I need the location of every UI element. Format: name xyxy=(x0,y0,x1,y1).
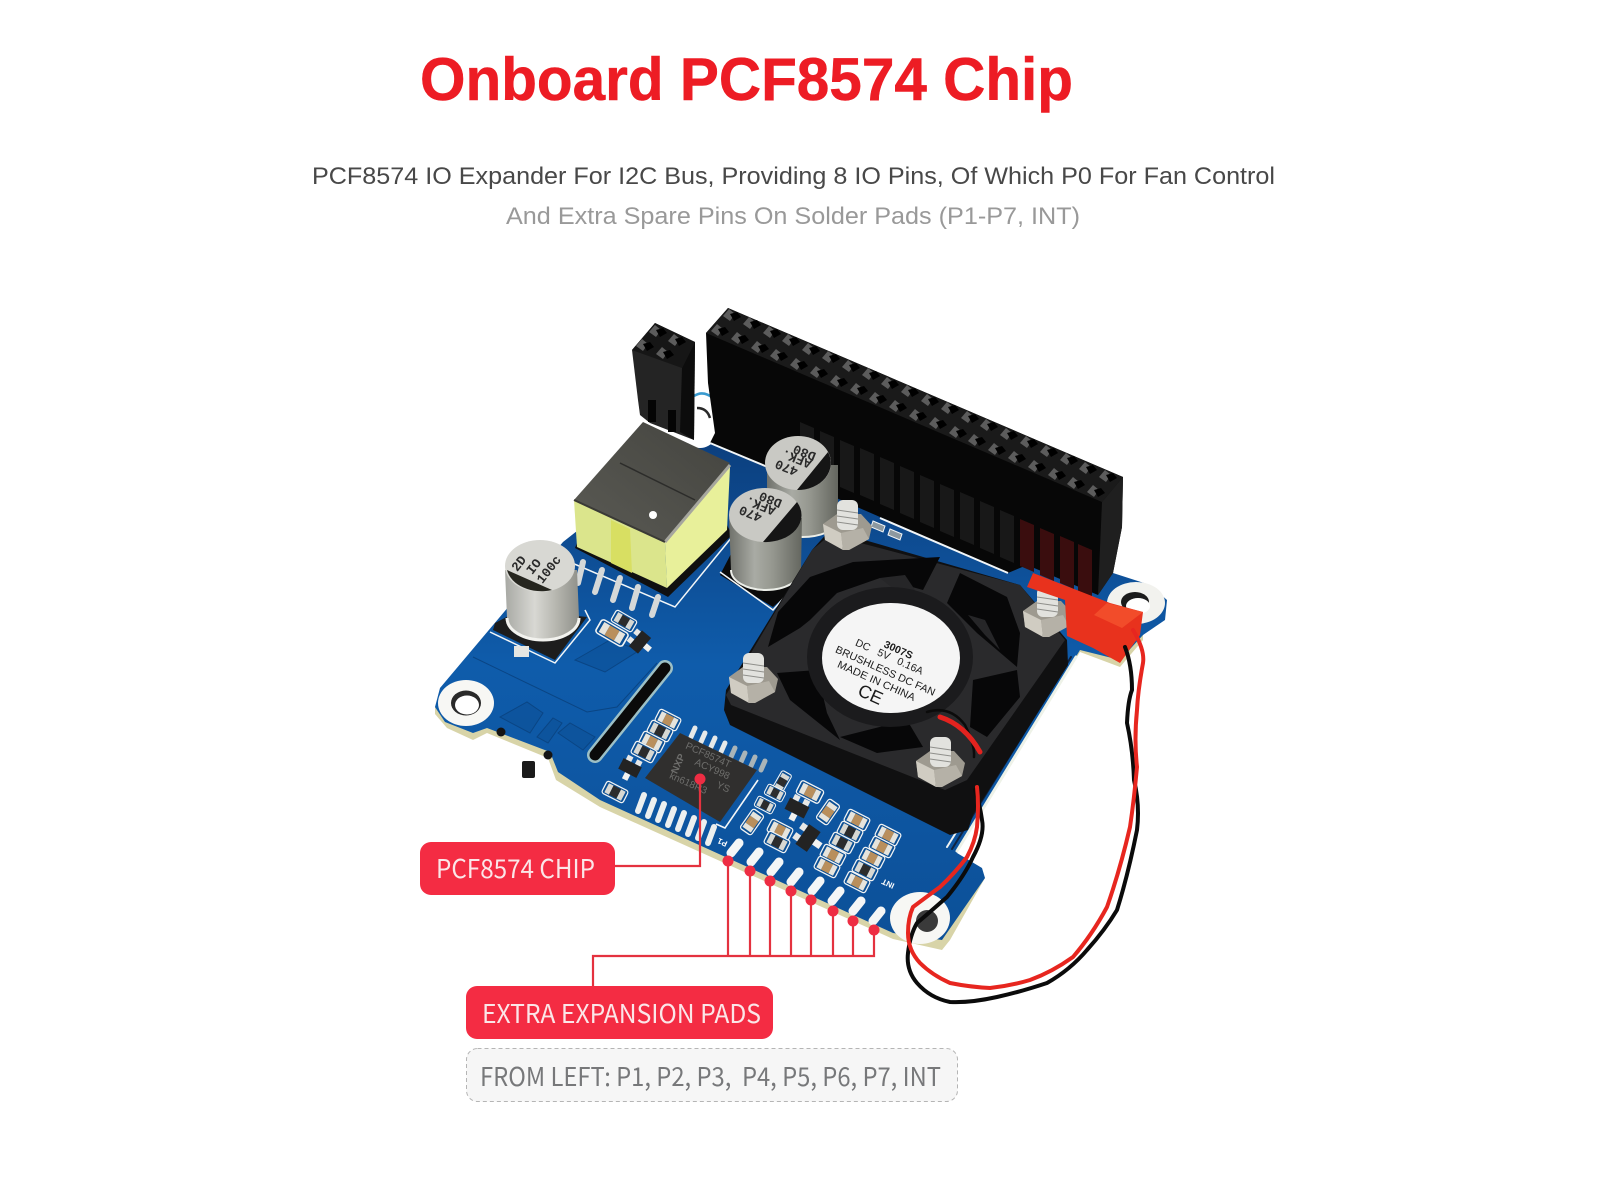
chip marking text: ACY998 xyxy=(693,757,732,782)
slot xyxy=(595,668,665,755)
mounting hole left xyxy=(438,680,494,726)
callout: PCF8574 chip xyxy=(420,842,615,895)
fan openings xyxy=(768,557,1020,753)
small silkscreen parts by fan xyxy=(871,521,902,540)
mounting hole bottom right xyxy=(890,892,950,944)
fan blades highlight xyxy=(880,575,1000,650)
capacitor front base xyxy=(720,550,800,607)
callout: PCF8574 chip: PCF8574 CHIP xyxy=(436,849,595,886)
components near left capacitor xyxy=(595,610,656,658)
text on back capacitor: D80 xyxy=(791,441,818,464)
header edge silkscreen line xyxy=(710,443,1008,573)
chip marking text: PCF8574T xyxy=(684,741,732,771)
power switch xyxy=(522,761,535,778)
passive component cluster xyxy=(740,770,902,893)
callout: extra expansion pads xyxy=(466,986,773,1039)
chip upper lead pads xyxy=(691,728,765,770)
header ribs xyxy=(800,422,1092,597)
fan sticker xyxy=(822,603,960,713)
capacitor left base xyxy=(490,610,590,663)
fan mounting nuts xyxy=(729,500,1072,787)
board edge thickness xyxy=(435,600,1143,950)
fan wires xyxy=(908,630,1143,1002)
board edge stripes xyxy=(947,655,1076,851)
fan sticker text: CE xyxy=(855,680,886,709)
small 2x2 header xyxy=(632,323,695,440)
header pin holes xyxy=(711,309,1117,497)
text on back capacitor: 470 xyxy=(773,456,800,479)
pad marker dots xyxy=(722,856,880,936)
transformer xyxy=(574,422,732,597)
chip marking text: kn618R3 xyxy=(667,771,709,797)
text on front capacitor: AFK. xyxy=(743,492,778,518)
fan hub xyxy=(807,587,973,727)
fan connector xyxy=(1027,573,1143,663)
chip marking text xyxy=(667,741,732,797)
transformer pins xyxy=(578,562,658,615)
illustration: PCB hat board with fan xyxy=(435,308,1167,1002)
wires inside fan xyxy=(927,710,980,757)
fan sticker text: 3007S xyxy=(882,639,915,662)
text on front capacitor: 470 xyxy=(737,502,764,525)
mounting hole top right xyxy=(1107,582,1165,624)
P1 and INT silkscreen: INT xyxy=(880,877,896,890)
subtitle line one: PCF8574 IO Expander For I2C Bus, Providing 8 IO Pins, Of Which P0 For Fan Control xyxy=(312,163,1275,190)
subtitle line two: And Extra Spare Pins On Solder Pads (P1-P7, INT) xyxy=(506,203,1080,230)
text on left capacitor: 100c xyxy=(534,553,565,587)
board vias xyxy=(496,728,552,760)
note: pad order: FROM LEFT: P1, P2, P3, P4, P5, P6, P7, INT xyxy=(480,1057,941,1094)
leader line and dot: chip xyxy=(615,774,706,866)
capacitor front xyxy=(729,488,802,590)
text on front capacitor: D80 xyxy=(757,488,784,511)
fan housing xyxy=(724,530,1068,835)
text on front capacitor xyxy=(737,488,784,525)
board blue surface xyxy=(435,438,1167,940)
text on left capacitor: 2D xyxy=(509,553,530,575)
text on left capacitor: IO xyxy=(524,556,545,578)
P1 and INT silkscreen: P1 xyxy=(716,836,729,848)
PCF8574 chip body xyxy=(645,733,758,828)
fan sticker text: BRUSHLESS DC FAN xyxy=(833,644,937,699)
fan sticker text: MADE IN CHINA xyxy=(835,659,917,704)
callout: extra expansion pads: EXTRA EXPANSION PADS xyxy=(482,994,761,1031)
P1 and INT silkscreen xyxy=(716,836,896,890)
title: Onboard PCF8574 Chip xyxy=(420,46,1073,113)
text on back capacitor xyxy=(773,441,818,479)
text on left capacitor xyxy=(509,553,565,587)
note: pad order xyxy=(466,1048,958,1102)
chip lower lead pads xyxy=(638,795,714,843)
fan sticker text: DC 5V 0.16A xyxy=(853,637,925,678)
capacitor back xyxy=(765,436,838,537)
transformer outline xyxy=(565,537,732,607)
capacitor base outline xyxy=(720,572,795,610)
mounting hole top left xyxy=(678,388,722,448)
solder pads xyxy=(731,843,881,921)
board traces xyxy=(473,640,657,750)
chip marking text: NXP xyxy=(670,752,688,776)
resistor pack near chip xyxy=(601,709,682,803)
leader lines: expansion pads xyxy=(593,861,874,986)
chip marking text: YS xyxy=(715,780,732,796)
capacitor left xyxy=(505,540,579,640)
header socket 40 pin xyxy=(706,308,1123,597)
text on back capacitor: AFK. xyxy=(779,445,814,471)
